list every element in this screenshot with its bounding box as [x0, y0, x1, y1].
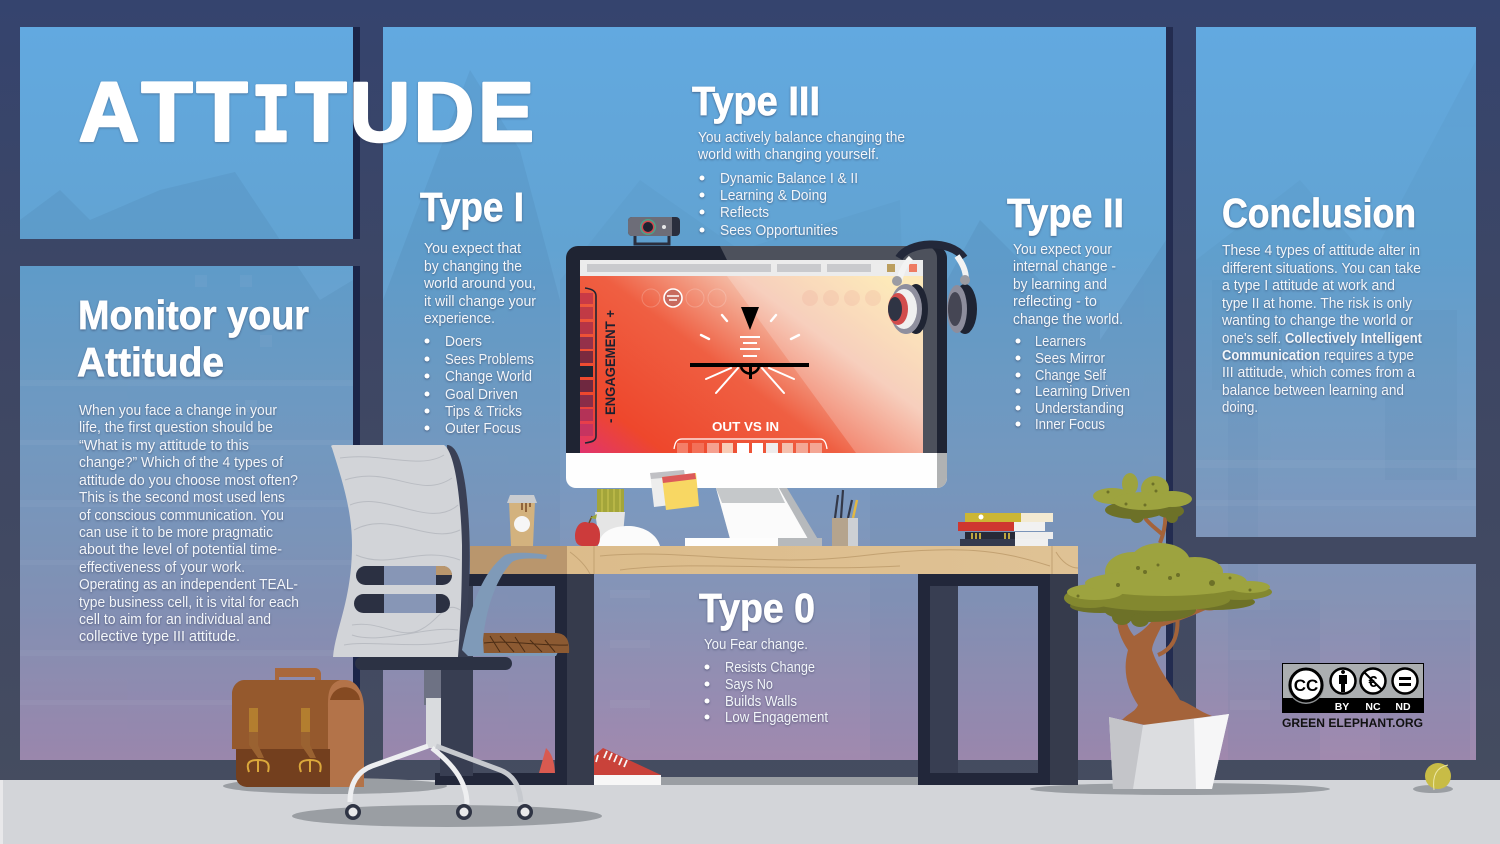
body text: type I: [423, 241, 536, 327]
creative commons badge: [1282, 663, 1424, 730]
body text: type III: world with changing yourself.: [697, 147, 879, 163]
body text: monitor: attitude do you choose most often?: [79, 473, 298, 489]
bullet list: type III: [700, 171, 858, 239]
body text: conclusion: a type I attitude at work and: [1222, 278, 1395, 294]
chair arm: [462, 553, 547, 656]
body text: type II: by learning and: [1013, 277, 1107, 293]
panel: type II: [1007, 190, 1130, 433]
body text: type 0: You Fear change.: [704, 637, 808, 653]
monitor body: [566, 246, 947, 488]
trunk: [1117, 512, 1224, 726]
bullet list: type 0: Low Engagement: [725, 710, 828, 726]
apple: [575, 514, 600, 546]
floor shadows: [223, 777, 1453, 827]
body text: monitor: change?” Which of the 4 types of: [79, 455, 284, 471]
lens diagram: [690, 307, 809, 393]
body text: type II: [1013, 242, 1123, 328]
shoes: [539, 748, 661, 785]
heading: monitor your attitude: Monitor your: [78, 292, 309, 338]
heading: type II: Type II: [1007, 190, 1124, 236]
creative commons badge: BY: [1335, 701, 1349, 713]
body text: conclusion: III attitude, which comes from a: [1222, 365, 1416, 381]
body text: type II: change the world.: [1013, 312, 1123, 328]
bullet list: type I: Goal Driven: [445, 387, 518, 403]
lower foliage: [1064, 543, 1272, 627]
panel: conclusion: [1221, 190, 1422, 416]
body text: monitor: When you face a change in your: [79, 403, 277, 419]
pencil cup: [832, 490, 858, 546]
body text: conclusion: requires a type: [1324, 348, 1414, 364]
body text: conclusion: different situations. You can take: [1222, 261, 1421, 277]
body text: conclusion: wanting to change the world or: [1221, 313, 1413, 329]
bullet list: type I: Change World: [445, 369, 532, 385]
body text: monitor: collective type III attitude.: [79, 629, 240, 645]
body text: monitor: type business cell, it is vital for each: [79, 595, 299, 611]
bonsai plant: [1064, 473, 1272, 789]
chair wheels: [345, 804, 533, 820]
floor: [0, 780, 1500, 844]
out vs in label: OUT VS IN: [712, 419, 779, 434]
office chair: [331, 445, 569, 820]
creative commons badge: NC: [1365, 701, 1381, 713]
body text: conclusion: [1221, 243, 1422, 416]
bullet list: type II: Inner Focus: [1035, 417, 1105, 433]
body text: type III: [697, 130, 905, 163]
body text: monitor: [79, 403, 299, 645]
screen: [580, 260, 923, 453]
body text: monitor: effectiveness of your work.: [79, 560, 245, 576]
bullet list: type I: Tips & Tricks: [445, 404, 522, 420]
creative commons badge: ND: [1395, 701, 1411, 713]
coffee cup: [507, 495, 537, 546]
engagement scale: - ENGAGEMENT +: [603, 310, 618, 423]
panel: type I: [420, 184, 536, 437]
title: ATTTUDE: [79, 65, 534, 159]
body text: monitor: can use it to be more pragmatic: [79, 525, 273, 541]
body text: conclusion: one's self.: [1222, 331, 1281, 347]
headphones: [888, 244, 977, 334]
monitor stand: [685, 488, 822, 546]
briefcase: [232, 668, 364, 787]
chair seat: [355, 633, 569, 670]
body text: type II: You expect your: [1013, 242, 1112, 258]
heading: monitor your attitude: Attitude: [77, 339, 224, 385]
bullet list: type 0: [704, 660, 828, 726]
bullet list: type I: Sees Problems: [445, 352, 534, 368]
chair back: [331, 445, 470, 657]
body text: conclusion: type II at home. The risk is only: [1222, 296, 1413, 312]
desk: [435, 546, 1078, 785]
bullet list: type III: Sees Opportunities: [720, 223, 838, 239]
bullet list: type II: Change Self: [1035, 368, 1107, 384]
body text: monitor: of conscious communication. You: [79, 508, 284, 524]
title: I: [251, 71, 291, 167]
body text: monitor: Operating as an independent TEAL-: [79, 577, 298, 593]
body text: type I: experience.: [424, 311, 495, 327]
body text: conclusion: Communication: [1222, 348, 1320, 364]
browser bar: [580, 260, 923, 276]
bullet list: type II: [1016, 334, 1130, 433]
heading: type I: Type I: [420, 184, 524, 230]
bullet list: type II: Learning Driven: [1035, 384, 1130, 400]
bullet list: type III: Reflects: [720, 205, 769, 221]
body text: conclusion: balance between learning and: [1222, 383, 1404, 399]
bullet list: type I: Doers: [445, 334, 482, 350]
desktop top: [470, 546, 1078, 574]
body text: monitor: “What is my attitude to this: [79, 438, 249, 454]
creative commons badge: GREEN ELEPHANT.ORG: [1282, 716, 1423, 730]
cactus and mouse: [595, 489, 660, 546]
body text: type I: by changing the: [424, 259, 522, 275]
body text: monitor: cell to aim for an individual and: [79, 612, 271, 628]
left desk leg frame: [435, 574, 594, 785]
creative commons badge: €: [1369, 674, 1378, 691]
webcam: [628, 217, 680, 244]
heading: type 0: Type 0: [699, 585, 815, 631]
engagement scale: [580, 288, 618, 443]
body text: type I: it will change your: [424, 294, 536, 310]
body text: conclusion: These 4 types of attitude alter in: [1222, 243, 1420, 259]
pot: [1109, 714, 1229, 789]
book stack: [958, 513, 1053, 546]
chair column and base: [350, 669, 521, 804]
body text: type II: reflecting - to: [1013, 294, 1097, 310]
sticky notes: [650, 470, 699, 510]
panel: type III: [692, 78, 905, 239]
right desk leg frame: [918, 574, 1078, 785]
body text: type III: You actively balance changing the: [698, 130, 905, 146]
body text: type II: internal change -: [1013, 259, 1116, 275]
bullet list: type 0: Resists Change: [725, 660, 815, 676]
bullet list: type I: Outer Focus: [445, 421, 521, 437]
body text: type I: You expect that: [424, 241, 521, 257]
bullet list: type II: Sees Mirror: [1035, 351, 1105, 367]
bullet list: type III: Learning & Doing: [720, 188, 827, 204]
body text: type I: world around you,: [423, 276, 536, 292]
bullet list: type 0: Says No: [725, 677, 773, 693]
monitor: [566, 246, 947, 546]
out vs in meter: [674, 439, 827, 453]
bullet list: type I: [424, 334, 534, 437]
panel: monitor your attitude: [77, 292, 309, 645]
heading: monitor your attitude: [77, 292, 309, 385]
body text: monitor: life, the first question should be: [79, 420, 273, 436]
body text: monitor: about the level of potential time-: [79, 542, 282, 558]
body text: conclusion: doing.: [1222, 400, 1258, 416]
heading: conclusion: Conclusion: [1222, 190, 1416, 236]
upper foliage: [1093, 473, 1192, 523]
heading: type III: Type III: [692, 78, 820, 124]
bullet list: type II: Learners: [1035, 334, 1086, 350]
panel: type 0: [699, 585, 828, 726]
screen circles: [642, 289, 881, 307]
body text: conclusion: Collectively Intelligent: [1285, 331, 1422, 347]
creative commons badge: CC: [1294, 676, 1318, 695]
tennis ball: [1425, 763, 1451, 790]
bullet list: type III: Dynamic Balance I & II: [720, 171, 858, 187]
bullet list: type II: Understanding: [1035, 401, 1124, 417]
body text: monitor: This is the second most used lens: [79, 490, 285, 506]
bullet list: type 0: Builds Walls: [725, 694, 797, 710]
